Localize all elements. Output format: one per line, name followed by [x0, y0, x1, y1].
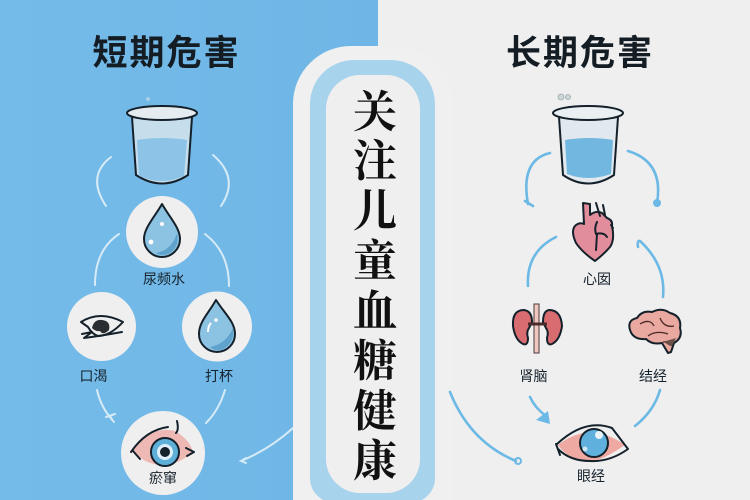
- title: vertical text: 健: [353, 387, 397, 436]
- icon: heart: [573, 203, 613, 261]
- label: eye: 瘀窜: [149, 470, 177, 486]
- icon: glass of water: [553, 94, 623, 184]
- icon: arrowhead: [536, 411, 550, 424]
- arrow: right upper arc: [205, 234, 229, 286]
- title: vertical text: [353, 88, 397, 486]
- arrow: long curve to eye: [450, 392, 516, 461]
- label: heart: 心囡: [583, 271, 611, 287]
- icon: eye circle: [121, 411, 205, 495]
- arrow: heart right arc: [638, 241, 663, 297]
- icon: red eye: [556, 425, 628, 461]
- panel: short-term flow: [67, 97, 293, 495]
- heading: long-term: 长期危害: [506, 34, 652, 73]
- icon: drop circle: [182, 292, 252, 362]
- panel: long-term background: [378, 0, 750, 500]
- title: vertical text: 糖: [353, 337, 397, 386]
- icon: kidneys: [513, 304, 562, 353]
- icon: glass of water: [127, 97, 197, 184]
- arrow: glass to kidney side: [525, 153, 550, 206]
- pill outer: [293, 46, 452, 500]
- icon: frequent urination circle: [126, 196, 198, 268]
- arrow: left upper arc: [95, 234, 119, 285]
- icon: brain: [629, 310, 681, 353]
- arrow: glass to left: [97, 157, 111, 206]
- arrow: pill to eye: [241, 428, 293, 463]
- title: vertical text: 关: [353, 88, 397, 137]
- panel: short-term background: [0, 0, 378, 500]
- pill inner: [326, 75, 420, 493]
- pill ring: [310, 60, 435, 500]
- label: kidney: 肾脑: [520, 368, 548, 384]
- arrow: glass to right: [213, 155, 229, 206]
- arrow: nerves to eye: [635, 390, 660, 426]
- icon: dry mouth circle: [67, 292, 136, 361]
- label: eye: 眼经: [577, 468, 605, 484]
- arrow: kidney to eye: [530, 397, 546, 416]
- arrow: heart left arc: [528, 237, 556, 286]
- title: vertical text: 康: [353, 437, 397, 486]
- icon: arrow tip: [653, 199, 661, 207]
- arrow: glass to brain side: [628, 151, 658, 203]
- icon: arrow tip: [515, 458, 521, 464]
- panel: center title pill: [293, 46, 452, 500]
- label: nerves: 结经: [639, 368, 667, 384]
- title: vertical text: 儿: [353, 187, 397, 236]
- arrow: right lower arc: [206, 390, 225, 423]
- title: vertical text: 注: [353, 137, 397, 186]
- panel: long-term flow: [450, 94, 681, 484]
- label: cup: 打杯: [205, 368, 233, 384]
- label: dry mouth: 口渴: [80, 368, 108, 384]
- title: vertical text: 血: [353, 287, 397, 336]
- title: vertical text: 童: [353, 237, 397, 286]
- label: frequent urination: 尿频水: [143, 271, 185, 287]
- heading: short-term: 短期危害: [92, 34, 238, 73]
- arrow: left lower arc: [97, 390, 115, 422]
